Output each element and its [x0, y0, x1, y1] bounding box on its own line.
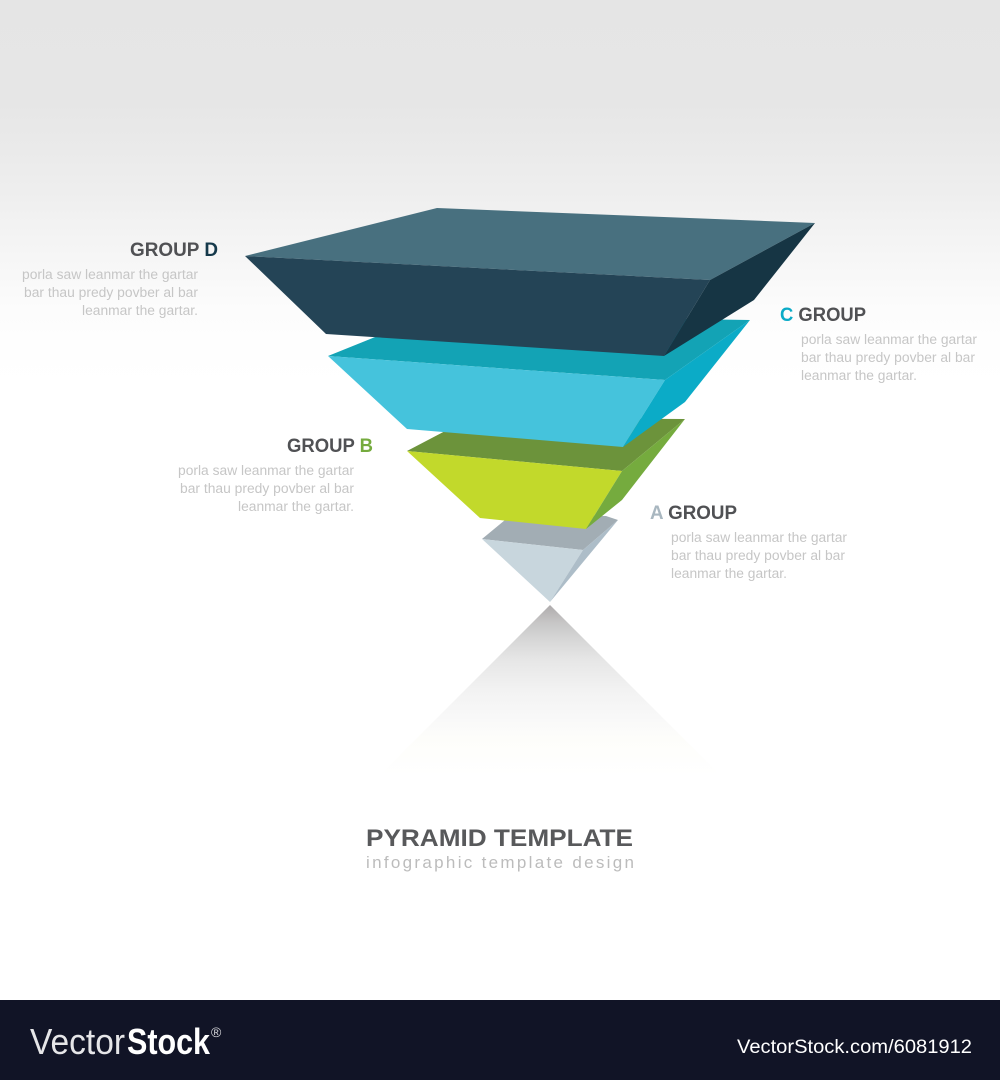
label: group D: GROUP D — [130, 240, 218, 261]
label: group B: GROUP B — [287, 436, 373, 457]
footer bar: Stock — [127, 1021, 211, 1062]
label: group C: leanmar the gartar. — [801, 368, 917, 383]
pyramid layer B — [407, 418, 685, 529]
label: group B: bar thau predy povber al bar — [180, 481, 355, 496]
label: group A — [650, 503, 848, 581]
label: group A: bar thau predy povber al bar — [671, 548, 846, 563]
footer bar: ® — [211, 1024, 222, 1040]
label: group D — [22, 240, 218, 318]
label: group C: bar thau predy povber al bar — [801, 350, 976, 365]
label: group C: C GROUP — [780, 305, 866, 326]
label: group C: porla saw leanmar the gartar — [801, 332, 978, 347]
label: group D: leanmar the gartar. — [82, 303, 198, 318]
label: group C — [780, 305, 978, 383]
label: group B — [178, 436, 373, 514]
label: group B: porla saw leanmar the gartar — [178, 463, 355, 478]
pyramid reflection — [380, 605, 720, 775]
pyramid layer C — [328, 315, 750, 447]
background gradient — [0, 0, 1000, 390]
footer bar: VectorStock.com/6081912 — [737, 1037, 972, 1058]
footer bar — [0, 1000, 1000, 1080]
footer bar: Vector — [30, 1021, 125, 1062]
pyramid layer D — [245, 208, 815, 356]
label: group A: porla saw leanmar the gartar — [671, 530, 848, 545]
label: group A: A GROUP — [650, 503, 737, 524]
label: group D: bar thau predy povber al bar — [24, 285, 199, 300]
label: group D: porla saw leanmar the gartar — [22, 267, 199, 282]
title: PYRAMID TEMPLATE — [366, 825, 633, 852]
pyramid layer A — [482, 515, 618, 602]
label: group A: leanmar the gartar. — [671, 566, 787, 581]
subtitle: infographic template design — [366, 853, 634, 872]
label: group B: leanmar the gartar. — [238, 499, 354, 514]
